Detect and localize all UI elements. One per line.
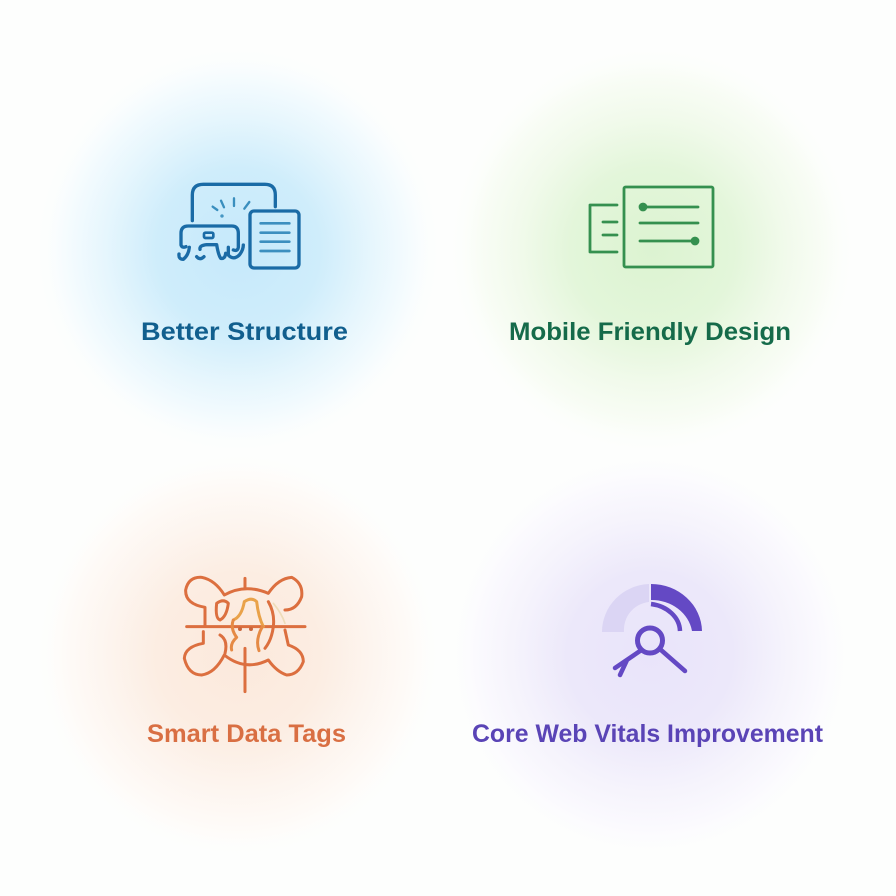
label: Smart Data Tags: Smart Data Tags	[147, 720, 346, 748]
panel: mobile friendly design	[447, 45, 857, 455]
purple glow	[445, 450, 855, 860]
icon: document with sliders	[590, 187, 713, 267]
orange glow	[33, 450, 443, 860]
label: Mobile Friendly Design: Mobile Friendly Design	[509, 318, 791, 346]
label: Better Structure: Better Structure	[141, 318, 348, 346]
panel: better structure	[33, 45, 443, 455]
green glow	[447, 45, 857, 455]
icon: circuit face	[184, 577, 305, 692]
label: Core Web Vitals Improvement: Core Web Vitals Improvement	[472, 720, 824, 748]
icon: monitor, robot and document	[179, 184, 299, 268]
icon: gauge with magnifier	[602, 584, 702, 675]
panel: core web vitals improvement	[445, 450, 855, 860]
blue glow	[33, 45, 443, 455]
panel: smart data tags	[33, 450, 443, 860]
